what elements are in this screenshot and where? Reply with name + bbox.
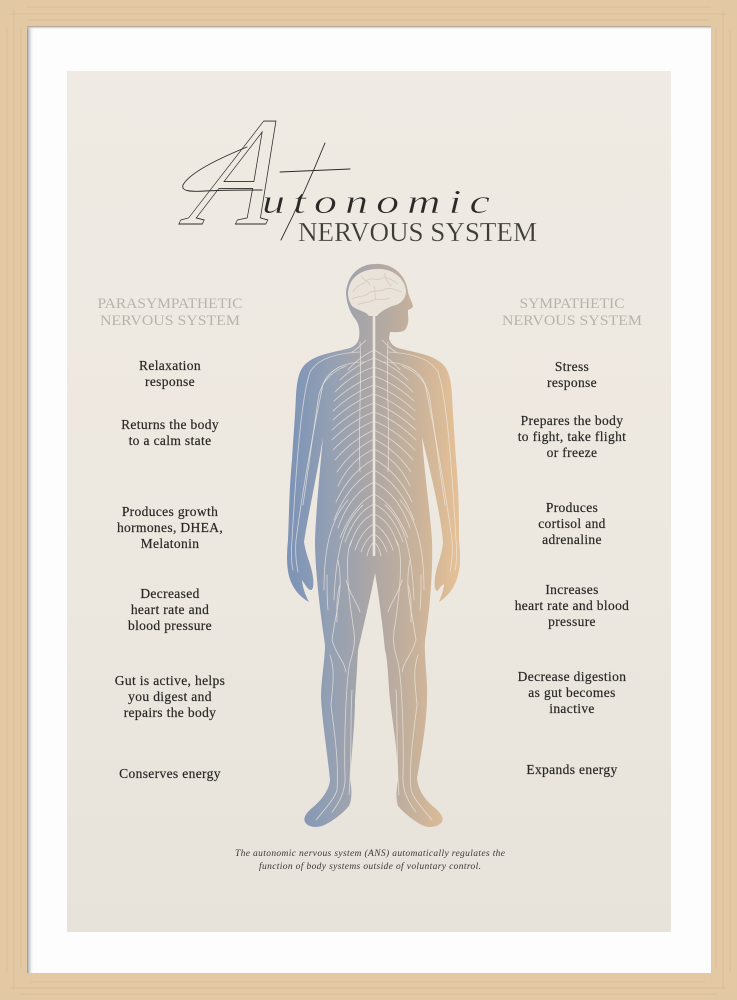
text: gut active: you digest and — [128, 689, 212, 704]
text: gut active: Gut is active, helps — [115, 673, 225, 688]
text: increased heart rate: Increases — [545, 582, 599, 597]
spinal cord — [373, 306, 375, 556]
heading: sympathetic: NERVOUS SYSTEM — [502, 313, 642, 329]
text: fight or flight: or freeze — [547, 445, 597, 460]
text: stress response — [547, 359, 597, 390]
text: increased heart rate — [515, 582, 629, 629]
text: relaxation response: response — [145, 374, 195, 389]
body silhouette — [287, 264, 460, 827]
text: growth hormones: hormones, DHEA, — [117, 520, 223, 535]
text: cortisol and adrenaline: adrenaline — [542, 532, 602, 547]
text: decreased heart rate: blood pressure — [128, 618, 212, 633]
text: gut active — [115, 673, 225, 720]
text: growth hormones: Melatonin — [141, 536, 199, 551]
text: conserves energy: Conserves energy — [119, 766, 221, 781]
text: decreased digestion: as gut becomes — [528, 685, 616, 700]
text: cortisol and adrenaline: cortisol and — [538, 516, 606, 531]
text: decreased heart rate — [128, 586, 212, 633]
text: calm state: to a calm state — [129, 433, 211, 448]
heading: parasympathetic: PARASYMPATHETIC — [98, 296, 242, 312]
heading: parasympathetic: NERVOUS SYSTEM — [100, 313, 240, 329]
text: decreased digestion: inactive — [549, 701, 595, 716]
text: stress response: Stress — [555, 359, 589, 374]
text: decreased heart rate: heart rate and — [131, 602, 209, 617]
text: increased heart rate: heart rate and blood — [515, 598, 629, 613]
title: script word — [168, 85, 498, 258]
text: gut active: repairs the body — [124, 705, 216, 720]
text: fight or flight — [518, 413, 626, 460]
heading: sympathetic: SYMPATHETIC — [520, 296, 624, 312]
text: relaxation response — [139, 358, 201, 389]
poster background — [67, 71, 671, 932]
nerve branches — [291, 340, 457, 820]
text: increased heart rate: pressure — [548, 614, 596, 629]
text: decreased digestion — [518, 669, 626, 716]
caption: The autonomic nervous system (ANS) automatically regulates the — [235, 848, 505, 859]
brain — [348, 269, 406, 316]
text: decreased digestion: Decrease digestion — [518, 669, 626, 684]
heading: sympathetic — [502, 296, 642, 329]
caption — [235, 848, 505, 872]
title: script word: A — [168, 85, 312, 258]
text: growth hormones — [117, 504, 223, 551]
decorative flourish — [183, 143, 350, 240]
text: calm state — [121, 417, 219, 448]
text: fight or flight: to fight, take flight — [518, 429, 626, 444]
text: cortisol and adrenaline: Produces — [546, 500, 598, 515]
text: stress response: response — [547, 375, 597, 390]
caption: function of body systems outside of voluntary control. — [259, 861, 481, 872]
human body figure — [287, 264, 460, 827]
text: expands energy: Expands energy — [526, 762, 618, 777]
text: calm state: Returns the body — [121, 417, 219, 432]
panel: sympathetic effects — [515, 359, 629, 777]
text: growth hormones: Produces growth — [122, 504, 218, 519]
text: cortisol and adrenaline — [538, 500, 606, 547]
panel: parasympathetic effects — [115, 358, 225, 781]
heading: parasympathetic — [98, 296, 242, 329]
text: fight or flight: Prepares the body — [521, 413, 623, 428]
text: relaxation response: Relaxation — [139, 358, 201, 373]
title: script word: utonomic — [262, 184, 498, 221]
text: decreased heart rate: Decreased — [140, 586, 200, 601]
title: subtitle: NERVOUS SYSTEM — [298, 216, 537, 247]
